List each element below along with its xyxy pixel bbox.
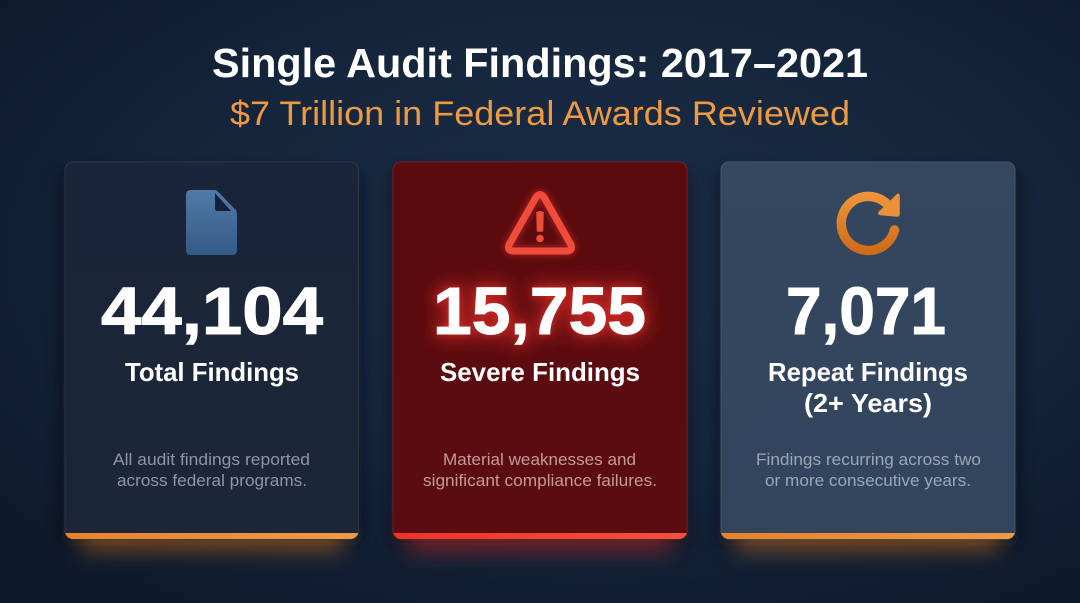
description <box>423 451 657 490</box>
description: Findings recurring across two <box>756 451 981 469</box>
number: 44,104: 44,104 <box>101 274 323 349</box>
label: repeat findings: Repeat Findings <box>768 357 968 387</box>
label: repeat findings <box>768 357 968 418</box>
icon: document <box>186 190 237 255</box>
description: or more consecutive years. <box>765 472 971 490</box>
label: total findings: Total Findings <box>125 357 299 387</box>
number: 15,755: 15,755 <box>433 274 646 349</box>
accent bar <box>65 533 358 539</box>
number: 15,755: 15,755 <box>433 274 646 349</box>
number: 15,755: 15,755 <box>433 274 646 349</box>
icon: repeat arrow <box>841 194 899 250</box>
panel: repeat findings <box>718 162 1018 550</box>
description: Material weaknesses and <box>443 451 636 469</box>
description: significant compliance failures. <box>423 472 657 490</box>
description: across federal programs. <box>117 472 307 490</box>
subtitle: $7 Trillion in Federal Awards Reviewed <box>230 95 850 133</box>
description: All audit findings reported <box>113 451 310 469</box>
title: Single Audit Findings: 2017–2021 <box>212 40 868 86</box>
description <box>113 451 310 490</box>
icon: warning triangle <box>508 194 572 251</box>
panel: total findings <box>62 162 362 550</box>
accent bar <box>721 533 1015 539</box>
panel: severe findings <box>390 162 690 552</box>
description <box>756 451 981 490</box>
number: 7,071: 7,071 <box>786 274 946 349</box>
label: severe findings: Severe Findings <box>440 357 640 387</box>
label: repeat findings: (2+ Years) <box>804 388 932 418</box>
accent bar <box>393 533 687 539</box>
